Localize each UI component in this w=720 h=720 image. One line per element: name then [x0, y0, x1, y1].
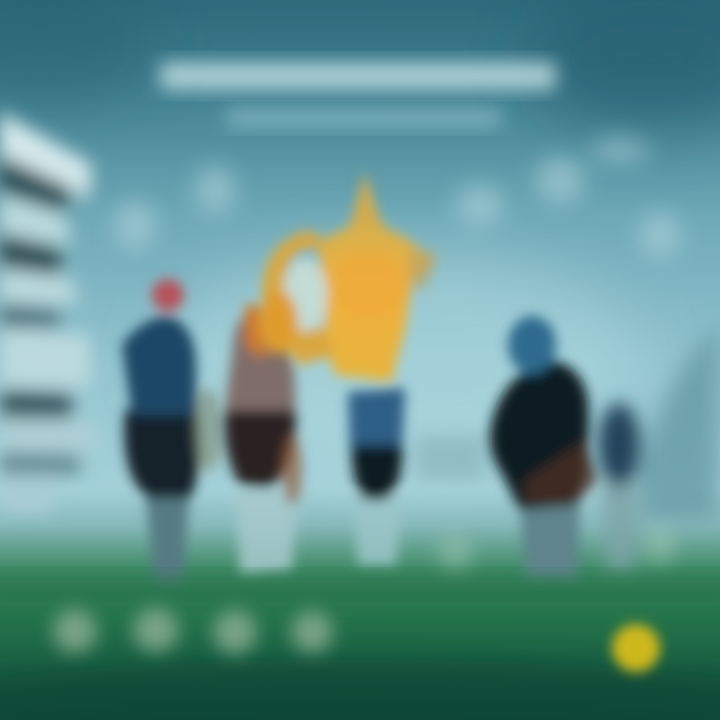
subtitle placeholder [226, 108, 502, 128]
figure 3 [348, 388, 405, 565]
yellow badge [612, 624, 660, 672]
distant city [415, 435, 485, 480]
figure 5 [598, 403, 640, 570]
title placeholder [160, 62, 556, 90]
figure 1 [122, 279, 222, 585]
grass edge [0, 580, 720, 606]
faint markers on the horizon [437, 525, 676, 570]
bottom badges [53, 608, 333, 654]
figure 4 [490, 316, 598, 580]
building on left [0, 112, 95, 512]
sky icons [115, 138, 680, 257]
distant mountain [630, 320, 720, 520]
trophy [258, 172, 438, 382]
figure 2 [225, 304, 302, 575]
